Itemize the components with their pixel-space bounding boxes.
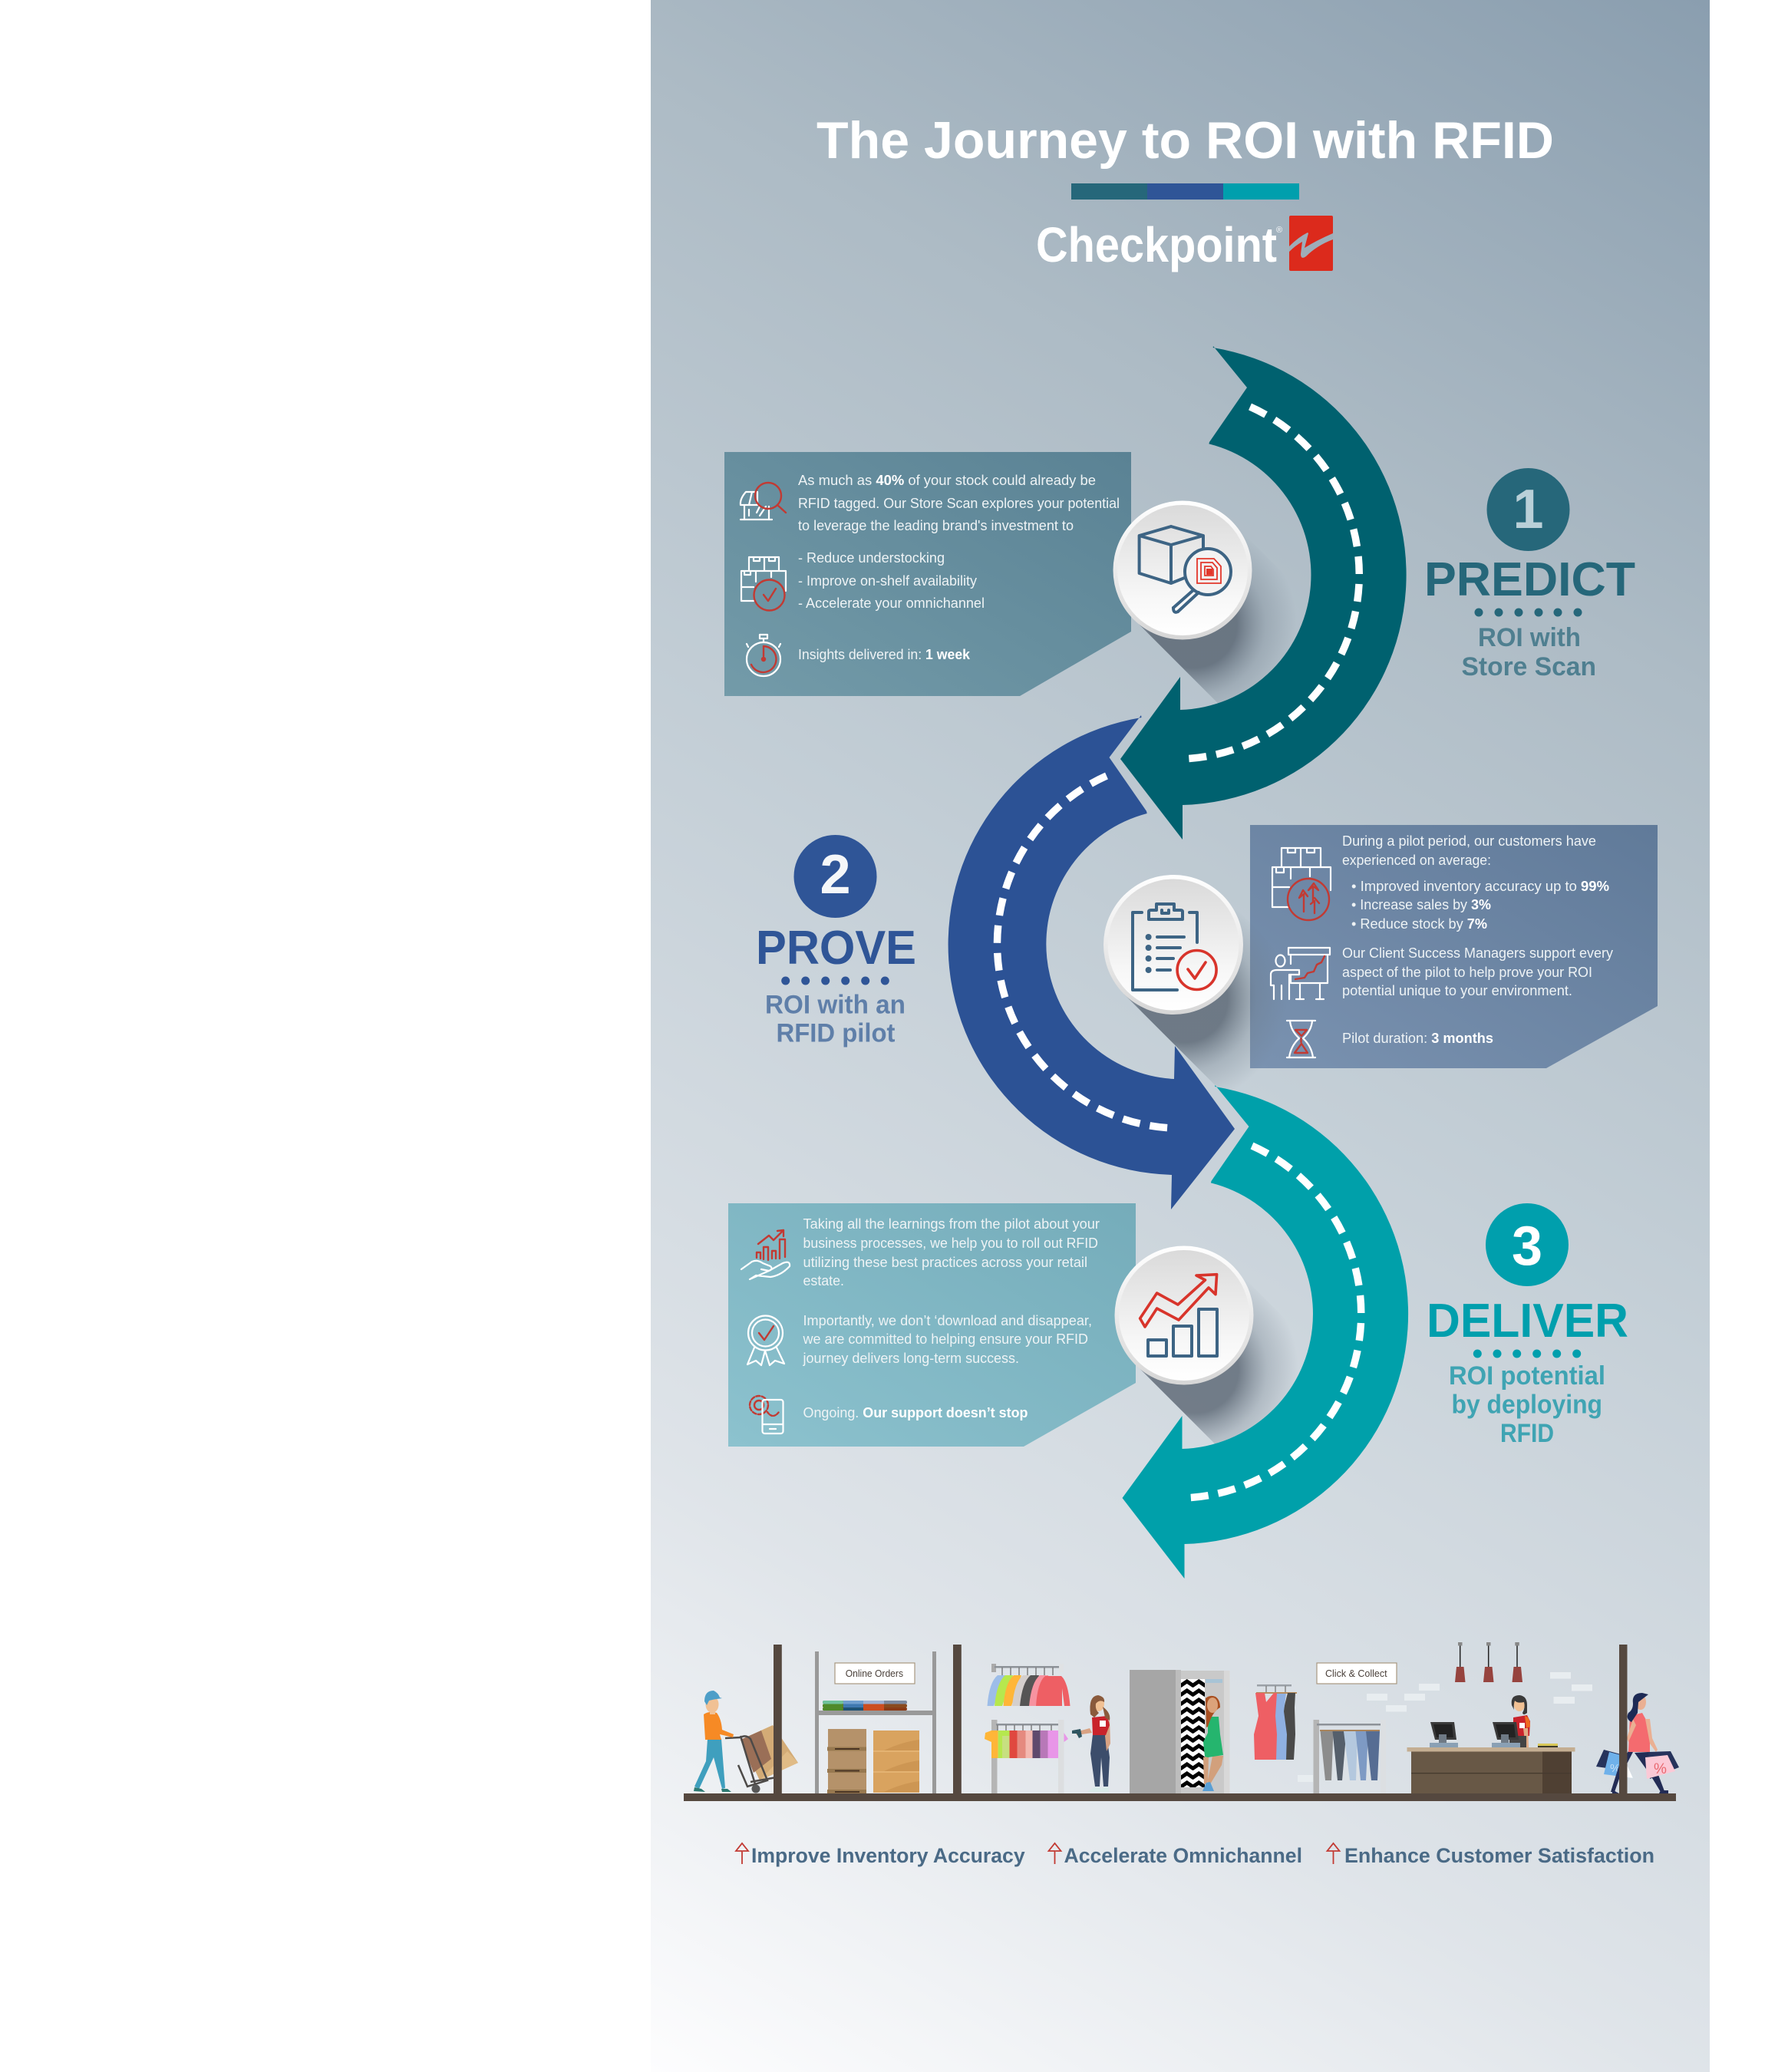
text: on average: experienced on average: — [1342, 852, 1491, 868]
icon: hand with chart — [741, 1230, 790, 1279]
colour bar — [1071, 183, 1299, 200]
panel: predict — [724, 452, 1131, 696]
text: importantly: Importantly, we don’t ‘download and disappear, — [803, 1312, 1092, 1328]
dots — [781, 976, 889, 985]
upper clothes rack — [987, 1664, 1070, 1706]
button: store scan — [1113, 500, 1252, 640]
dots — [1475, 608, 1582, 617]
arrow: deliver — [1122, 1085, 1408, 1579]
courier with trolley — [694, 1691, 798, 1793]
background banner — [651, 0, 1710, 2072]
dresses on rail — [1254, 1684, 1297, 1760]
button: pilot checklist — [1103, 875, 1243, 1015]
text: estate: estate. — [803, 1272, 844, 1288]
text: potential unique: potential unique to your environment. — [1342, 982, 1572, 998]
monitors — [1430, 1722, 1520, 1747]
logo mark — [1289, 216, 1333, 271]
heading: prove: PROVE — [756, 922, 916, 975]
sign: click and collect: Click & Collect — [1325, 1668, 1387, 1679]
number badge 2 — [793, 835, 876, 918]
text: pilot duration: Pilot duration: 3 months — [1342, 1030, 1493, 1046]
curtain — [1181, 1679, 1205, 1787]
icon: up arrow — [1048, 1843, 1061, 1864]
shopping bag: pink: % — [1654, 1761, 1667, 1777]
subtitle line 2: by deploying — [1452, 1391, 1602, 1420]
text: business processes: business processes, we help you to roll out RFID — [803, 1235, 1098, 1251]
icon: gear and phone — [750, 1396, 783, 1434]
text: best practices: utilizing these best practices across your retail — [803, 1254, 1087, 1270]
heading: deliver: DELIVER — [1427, 1295, 1628, 1348]
text: journey: journey delivers long-term success. — [803, 1350, 1019, 1366]
parcels — [741, 1725, 798, 1780]
text: reduce stock: • Reduce stock by 7% — [1351, 916, 1487, 932]
button shadow: predict — [1133, 521, 1356, 744]
text: 40 percent: As much as 40% of your stock could already be — [798, 472, 1096, 488]
stacked boxes right — [873, 1731, 919, 1793]
icon: up arrow — [1328, 1843, 1340, 1864]
icon: boxes check — [741, 557, 786, 611]
white wall bricks — [1298, 1672, 1592, 1782]
pendant lamps — [1455, 1642, 1522, 1682]
icon: bars — [1148, 1309, 1217, 1356]
text: aspect of pilot: aspect of the pilot to help prove your ROI — [1342, 964, 1592, 980]
step 3 label — [1427, 1203, 1628, 1448]
arrow: predict — [1120, 346, 1407, 840]
icon: award ribbon — [747, 1315, 784, 1365]
button: growth chart — [1114, 1246, 1254, 1384]
benefit: omnichannel — [1048, 1843, 1302, 1867]
number badge 1 — [1487, 468, 1570, 551]
text: inventory accuracy: • Improved inventory accuracy up to 99% — [1351, 878, 1609, 894]
arrow: prove — [948, 715, 1235, 1209]
heading: predict: PREDICT — [1424, 553, 1635, 606]
button shadow: prove — [1124, 896, 1348, 1119]
dots — [1473, 1349, 1581, 1358]
number badge 3 — [1486, 1203, 1569, 1286]
logo: Checkpoint — [1036, 216, 1333, 272]
sign: online orders: Online Orders — [846, 1668, 903, 1679]
store scene — [684, 1642, 1679, 1801]
sign: online orders — [835, 1663, 915, 1684]
icon: stopwatch — [747, 635, 780, 676]
folded clothes — [823, 1701, 907, 1711]
subtitle line 1: ROI with an — [765, 990, 906, 1019]
staff with scanner — [1072, 1695, 1110, 1792]
label: Accelerate Omnichannel — [1064, 1844, 1302, 1867]
text: client success: Our Client Success Managers support every — [1342, 945, 1614, 961]
trolley — [725, 1736, 777, 1787]
structural posts — [774, 1645, 962, 1794]
number 1: 1 — [1513, 479, 1544, 540]
cashier — [1509, 1695, 1530, 1747]
text: increase sales: • Increase sales by 3% — [1351, 896, 1491, 912]
registered mark: ® — [1276, 226, 1282, 235]
number 2: 2 — [820, 844, 851, 906]
floor — [684, 1793, 1676, 1801]
subtitle line 2: RFID pilot — [777, 1019, 895, 1048]
changing room — [1130, 1670, 1229, 1793]
text: store scan: RFID tagged. Our Store Scan explores your potential — [798, 495, 1120, 511]
torso — [704, 1712, 734, 1740]
step 2 label — [756, 835, 916, 1048]
sign: click and collect — [1317, 1663, 1397, 1684]
legs — [694, 1739, 725, 1789]
customer in green dress — [1202, 1696, 1223, 1791]
text: insights delivered: Insights delivered in: 1 week — [798, 646, 971, 662]
trousers rack — [1314, 1720, 1386, 1793]
shopper behind post — [1596, 1693, 1679, 1793]
icon: check circle — [1177, 950, 1216, 990]
shelf unit — [815, 1651, 936, 1793]
icon: up arrow — [736, 1843, 748, 1864]
text: reduce understocking: - Reduce understocking — [798, 549, 945, 566]
panel: deliver — [728, 1203, 1136, 1447]
text: ongoing support: Ongoing. Our support doesn’t stop — [803, 1404, 1028, 1420]
text: committed: we are committed to helping ensure your RFID — [803, 1331, 1088, 1347]
benefit: customer satisfaction — [1328, 1843, 1654, 1867]
icon: store magnifier — [741, 483, 786, 520]
head — [706, 1696, 718, 1713]
logo wordmark: Checkpoint — [1036, 217, 1277, 272]
button shadow: deliver — [1135, 1266, 1357, 1489]
icon: magnifier — [1173, 549, 1231, 612]
text: improve availability: - Improve on-shelf availability — [798, 572, 978, 589]
counter — [1407, 1744, 1575, 1796]
subtitle line 2: Store Scan — [1461, 652, 1596, 681]
label: Enhance Customer Satisfaction — [1344, 1844, 1654, 1867]
icon: presenter — [1271, 948, 1330, 999]
number 3: 3 — [1512, 1216, 1542, 1277]
lower clothes rack — [985, 1720, 1068, 1793]
text: taking learnings: Taking all the learnings from the pilot about your — [803, 1216, 1100, 1232]
text: pilot period: During a pilot period, our customers have — [1342, 833, 1596, 849]
step 1 label — [1424, 468, 1635, 681]
icon: boxes arrows — [1272, 848, 1331, 920]
text: leverage: to leverage the leading brand's investment to — [798, 517, 1074, 533]
panel: prove — [1124, 825, 1658, 1119]
icon: rising arrow — [1140, 1275, 1217, 1327]
label: Improve Inventory Accuracy — [751, 1844, 1025, 1867]
icon: cube — [1140, 526, 1203, 583]
subtitle line 1: ROI potential — [1449, 1361, 1605, 1391]
subtitle line 1: ROI with — [1478, 623, 1581, 652]
stacked boxes left — [827, 1729, 866, 1793]
icon: clipboard — [1133, 904, 1197, 990]
subtitle line 3: RFID — [1500, 1419, 1554, 1448]
post by entrance — [1619, 1645, 1627, 1794]
icon: hourglass — [1287, 1021, 1315, 1057]
title: The Journey to ROI with RFID — [816, 111, 1554, 170]
benefit: inventory accuracy — [736, 1843, 1025, 1867]
text: accelerate omnichannel: - Accelerate your omnichannel — [798, 595, 985, 611]
shopping bag: blue: % — [1610, 1762, 1620, 1775]
